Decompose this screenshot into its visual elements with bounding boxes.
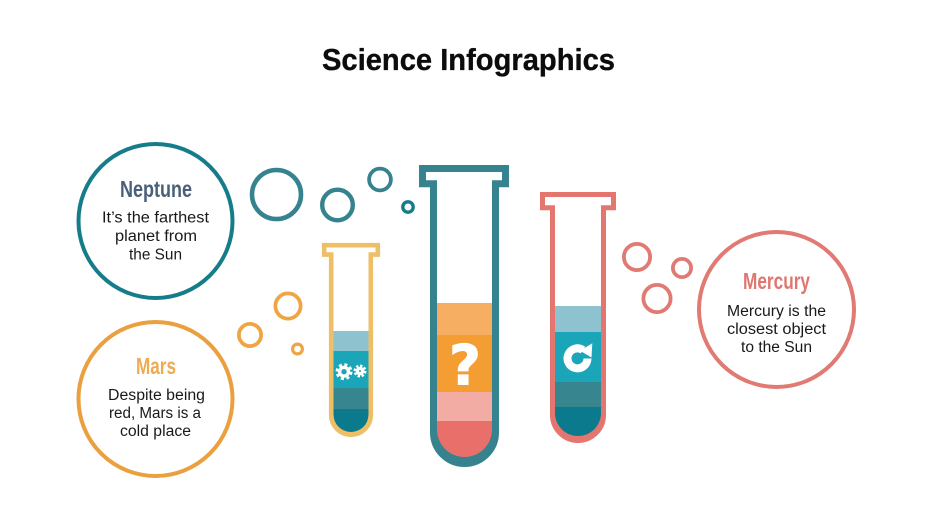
Neptune description: the Sun — [129, 246, 182, 264]
Mars heading: Mars — [136, 353, 176, 379]
yellow tube base fill — [331, 400, 371, 435]
Mars description — [108, 387, 205, 440]
test tube: yellow — [324, 245, 378, 435]
coral tube liquid layers — [554, 306, 602, 438]
Mercury description — [727, 303, 827, 356]
icon: refresh arrow — [568, 343, 592, 368]
Mercury heading: Mercury — [743, 268, 810, 294]
Neptune heading: Neptune — [120, 176, 192, 202]
test tube: coral — [542, 194, 614, 440]
Mars circle outline — [78, 322, 232, 476]
icon: question mark: ? — [449, 334, 481, 398]
yellow tube outline — [324, 245, 378, 435]
Neptune description: It’s the farthest — [102, 210, 210, 226]
coral tube base fill — [552, 395, 604, 440]
panel: Mars — [78, 322, 232, 476]
icon: gears — [337, 365, 365, 379]
title: Science Infographics — [322, 42, 615, 77]
coral tube outline — [542, 194, 614, 440]
Neptune circle outline — [78, 144, 232, 298]
Mars description: Despite being — [108, 387, 205, 404]
teal tube base fill — [434, 410, 496, 464]
Mars description: cold place — [120, 423, 191, 440]
teal bubbles — [252, 169, 413, 220]
teal tube liquid layers — [436, 303, 493, 459]
Mercury circle outline — [699, 232, 854, 387]
panel: Mercury — [699, 232, 854, 387]
Mercury description: to the Sun — [741, 339, 812, 356]
panel: Neptune — [78, 144, 232, 298]
orange bubbles — [239, 293, 302, 354]
Neptune description — [102, 210, 210, 264]
yellow tube liquid layers — [333, 331, 369, 435]
Neptune description: planet from — [115, 228, 197, 245]
coral bubbles — [624, 244, 691, 312]
teal tube outline — [422, 168, 506, 464]
Mars description: red, Mars is a — [109, 405, 201, 422]
Mercury description: closest object — [727, 321, 827, 338]
test tube: teal — [422, 168, 506, 464]
Mercury description: Mercury is the — [727, 303, 826, 320]
